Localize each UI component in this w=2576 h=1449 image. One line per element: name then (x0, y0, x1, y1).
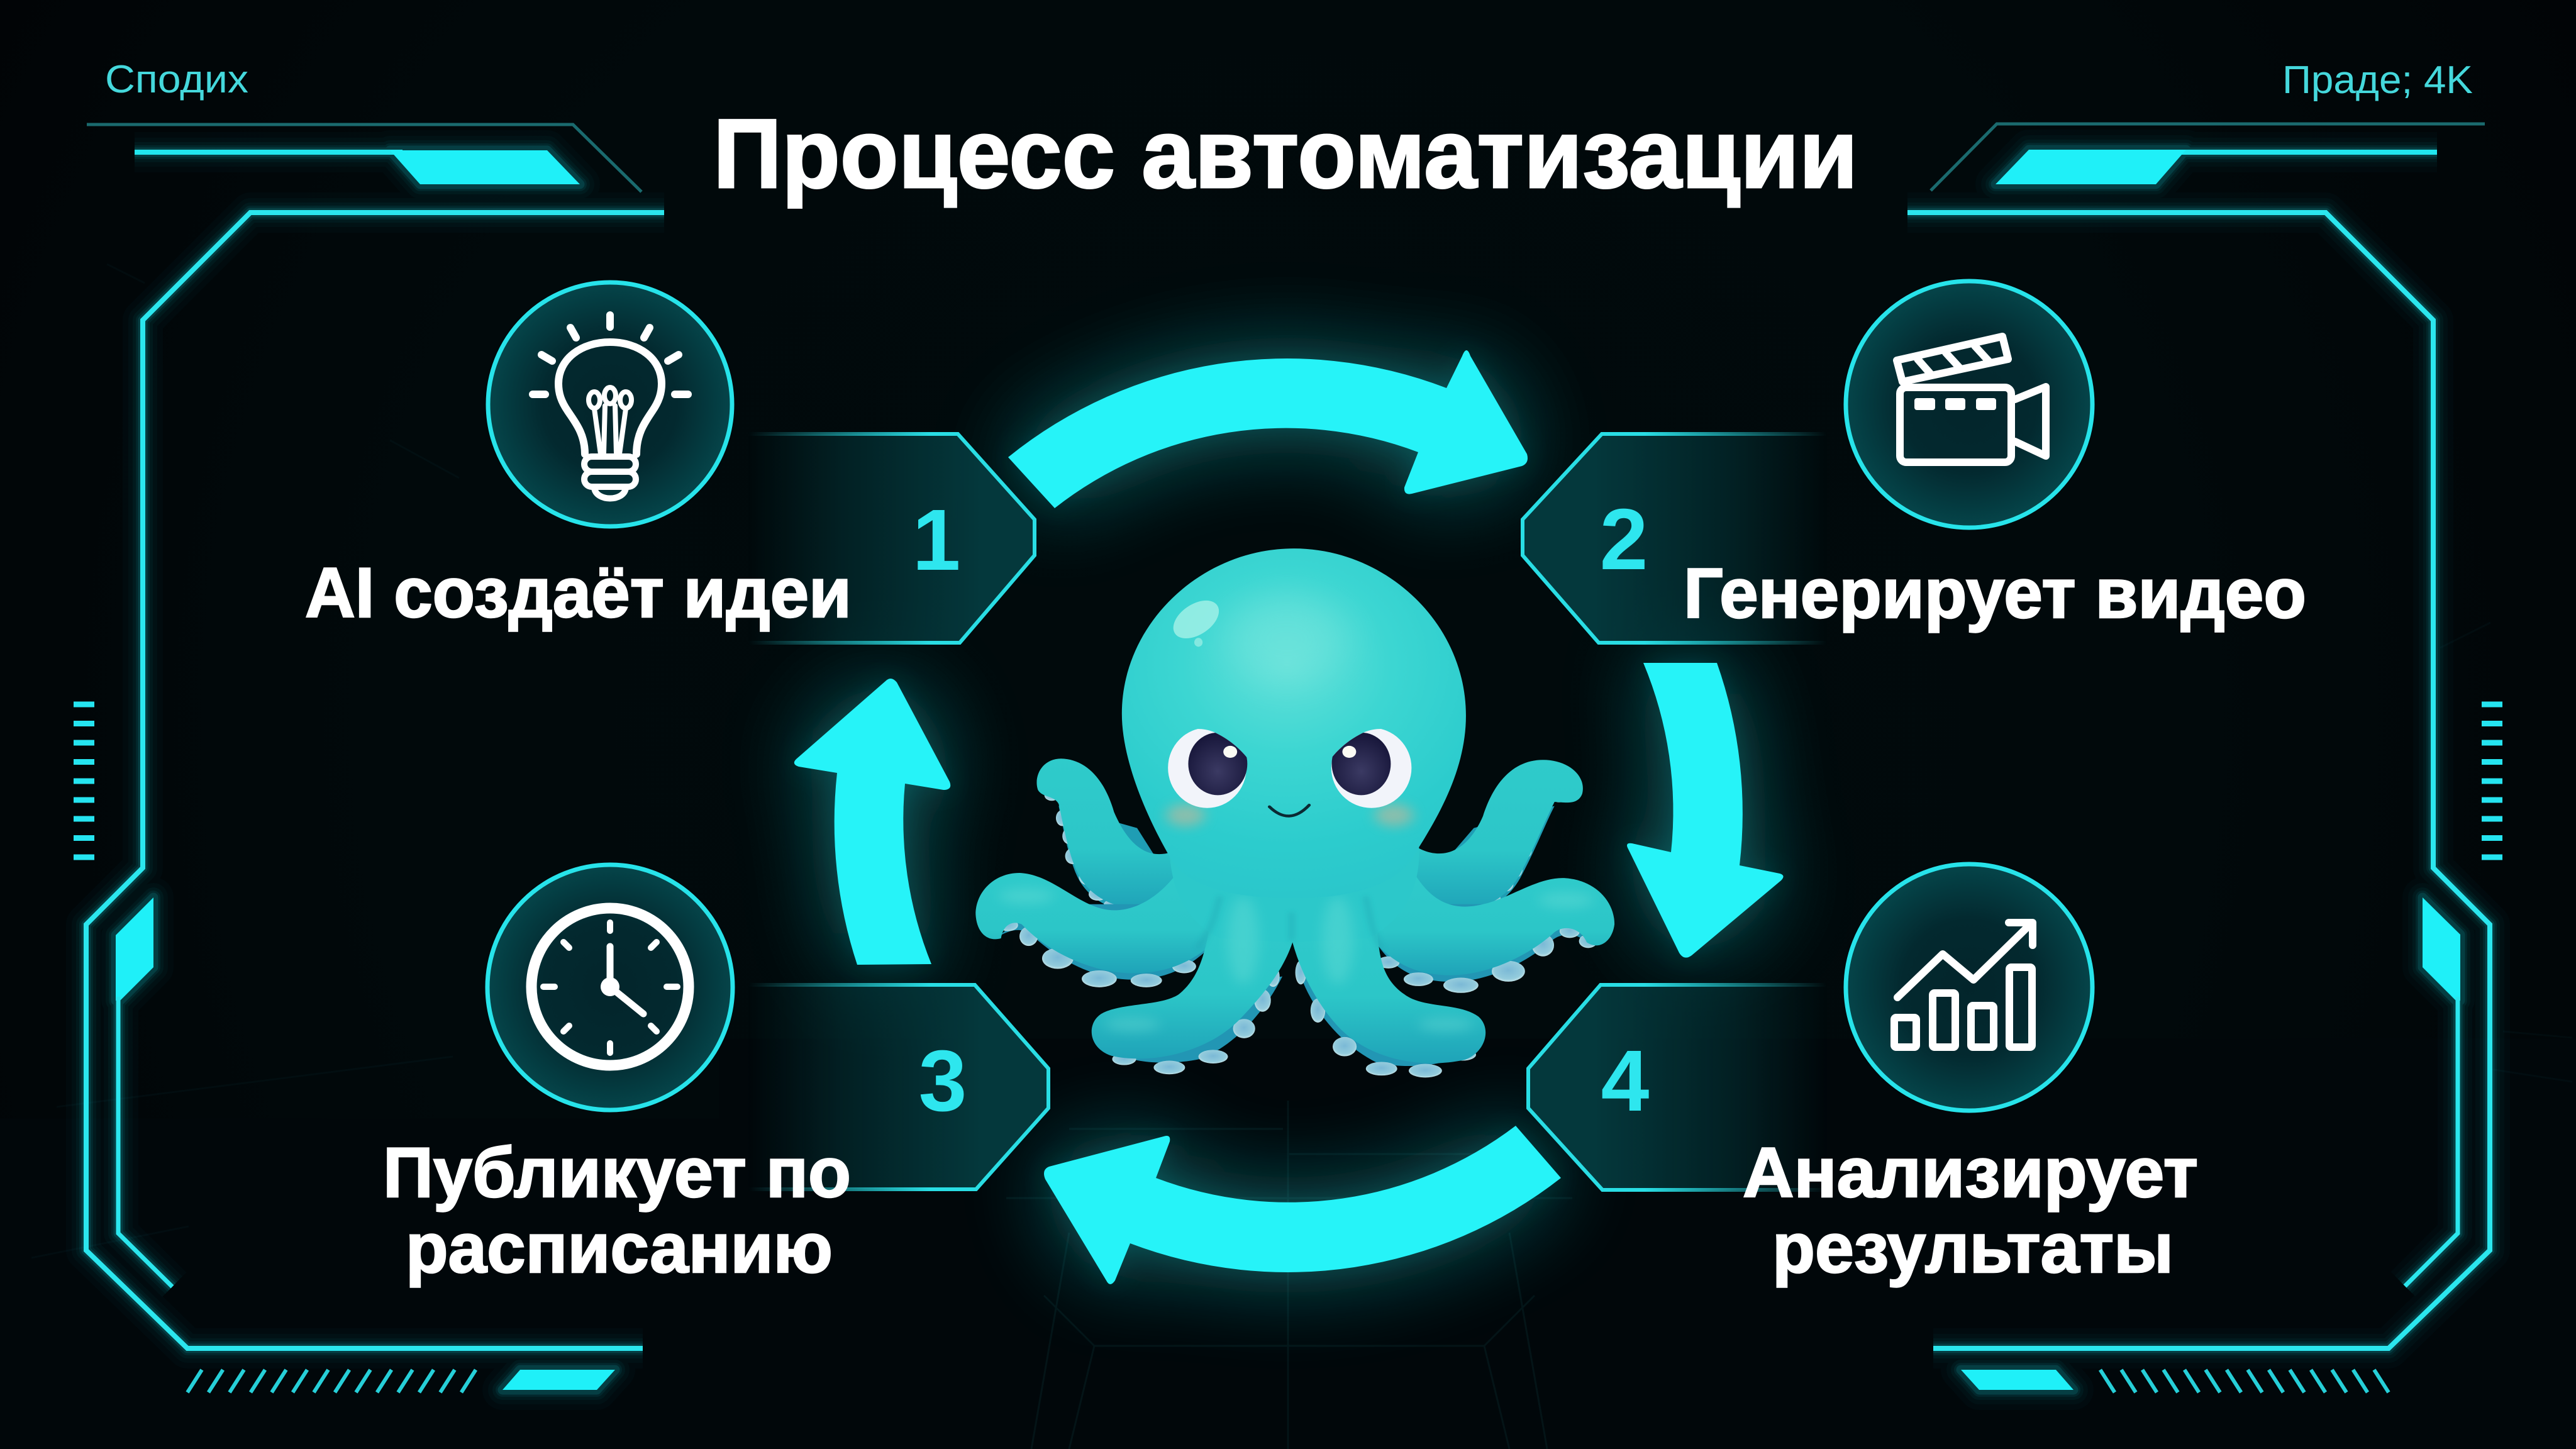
arrow: step 2 to 4 (1627, 663, 1784, 958)
number 4: 4 (1601, 1033, 1650, 1130)
number plate 2 (1523, 434, 1827, 643)
panel: step 2 (1523, 281, 2306, 643)
octopus mascot (975, 548, 1614, 1077)
body skirt (1169, 840, 1419, 942)
upper tentacle suckers (1045, 789, 1567, 909)
label 4 (1743, 1133, 2198, 1287)
head (1122, 548, 1466, 898)
middle tentacle suckers (998, 919, 1597, 993)
label 3 (383, 1133, 851, 1287)
number plate 4 (1528, 985, 1827, 1190)
icon: growth chart (1846, 864, 2092, 1111)
label 3: Публикует по (383, 1133, 851, 1212)
header label: right: Праде; 4K (2282, 58, 2473, 102)
icon: clock (487, 865, 733, 1110)
number 1: 1 (913, 492, 960, 589)
label 2: Генерирует видео (1684, 554, 2306, 633)
mouth (1270, 805, 1309, 816)
left eye (1168, 728, 1247, 808)
blush (1166, 804, 1413, 826)
icon: light bulb (488, 282, 732, 526)
tentacle highlights (999, 888, 1594, 1032)
panel: step 4 (1528, 864, 2198, 1287)
panel: step 3 (383, 865, 1048, 1287)
label 4: результаты (1772, 1209, 2174, 1287)
head sheen (1227, 596, 1347, 684)
right eye (1331, 728, 1411, 808)
number 3: 3 (919, 1033, 967, 1130)
number 2: 2 (1600, 491, 1648, 588)
arrow: step 1 to 2 (1008, 350, 1528, 508)
top accent line: right (1931, 124, 2485, 191)
upper tentacle undersides (1058, 806, 1555, 914)
front tentacles (1092, 896, 1485, 1063)
icon: video camera (1846, 281, 2092, 528)
head highlight (1165, 593, 1227, 647)
top accent line: left (87, 125, 641, 192)
arrow: step 4 to 3 (1044, 1126, 1561, 1284)
front tentacle suckers (1112, 960, 1476, 1077)
upper tentacles (1036, 758, 1583, 910)
number plate 1 (748, 434, 1035, 643)
label 3: расписанию (406, 1209, 833, 1287)
label 4: Анализирует (1743, 1133, 2198, 1212)
arrow: step 3 to 1 (794, 679, 950, 965)
header label: left: Сподих (105, 58, 248, 101)
number plate 3 (748, 985, 1048, 1189)
tentacle creases (1197, 896, 1382, 948)
frame: left HUD (74, 150, 664, 1392)
front tentacle undersides (1102, 977, 1479, 1066)
title: Процесс автоматизации (713, 99, 1858, 209)
middle tentacles (975, 864, 1614, 975)
label 1: AI создаёт идеи (305, 553, 852, 632)
frame: right HUD (1907, 150, 2502, 1392)
panel: step 1 (305, 282, 1035, 643)
middle tentacle undersides (999, 904, 1587, 982)
